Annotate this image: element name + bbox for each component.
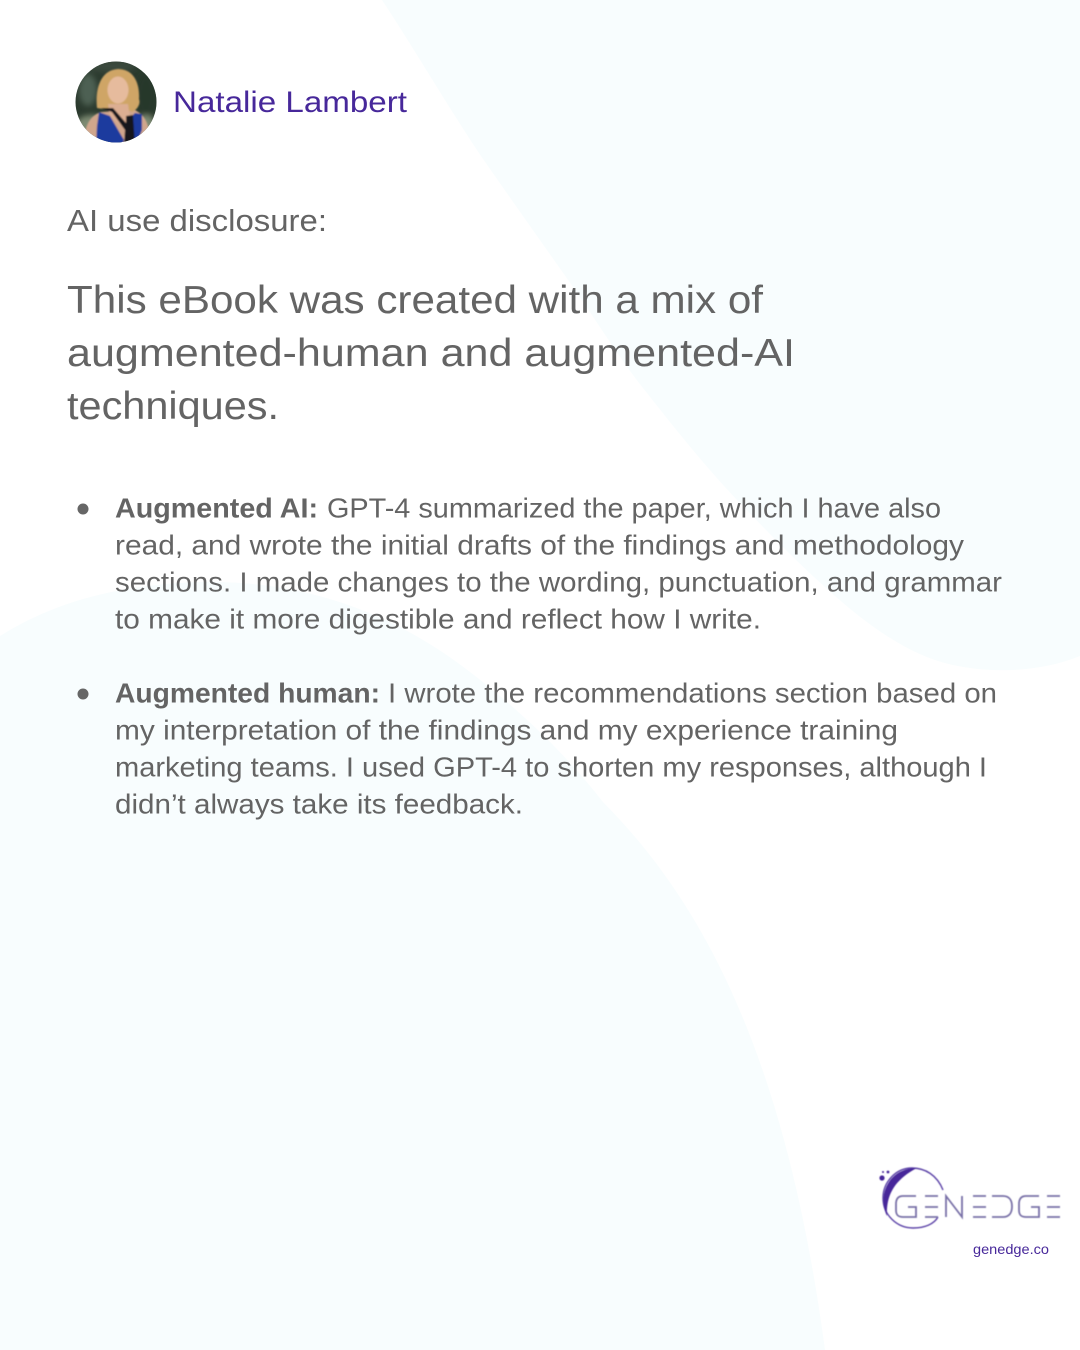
body text: augmented human: didn’t always take its feedback. [115, 788, 523, 820]
logo url: genedge.co [973, 1242, 1049, 1257]
logo wordmark letters [896, 1196, 1060, 1217]
logo dots [879, 1171, 892, 1187]
label: AI use disclosure: AI use disclosure: [67, 203, 327, 238]
heading: This eBook was created with a mix of [67, 279, 763, 322]
avatar [75, 60, 157, 145]
heading: augmented-human and augmented-AI [67, 332, 795, 375]
logo ring [883, 1168, 943, 1228]
bullet dot [78, 688, 88, 700]
background shape: top right [382, 0, 1080, 670]
lead-in: augmented human: Augmented human: [115, 678, 380, 708]
body text: augmented AI: GPT-4 summarized the paper, which I have also [327, 492, 941, 524]
bullet: augmented AI [78, 492, 1002, 634]
body text: augmented AI: read, and wrote the initial drafts of the findings and methodology [115, 530, 964, 560]
body text: augmented human: marketing teams. I used GPT-4 to shorten my responses, although I [115, 752, 987, 782]
body text: augmented AI: sections. I made changes to the wording, punctuation, and grammar [115, 566, 1002, 598]
body text: augmented human [115, 678, 997, 820]
lead-in: augmented AI: Augmented AI: [115, 492, 318, 524]
body text: augmented AI [115, 492, 1002, 634]
body text: augmented human: my interpretation of the findings and my experience training [115, 714, 898, 746]
body text: augmented human: I wrote the recommendations section based on [388, 678, 997, 708]
heading [67, 279, 795, 428]
heading: techniques. [67, 385, 279, 428]
background shape: bottom left [0, 582, 825, 1350]
author name: Natalie Lambert [173, 86, 407, 119]
bullet dot [78, 504, 88, 514]
body text: augmented AI: to make it more digestible and reflect how I write. [115, 604, 761, 634]
logo: Genedge [879, 1168, 1060, 1228]
bullet: augmented human [78, 678, 997, 820]
